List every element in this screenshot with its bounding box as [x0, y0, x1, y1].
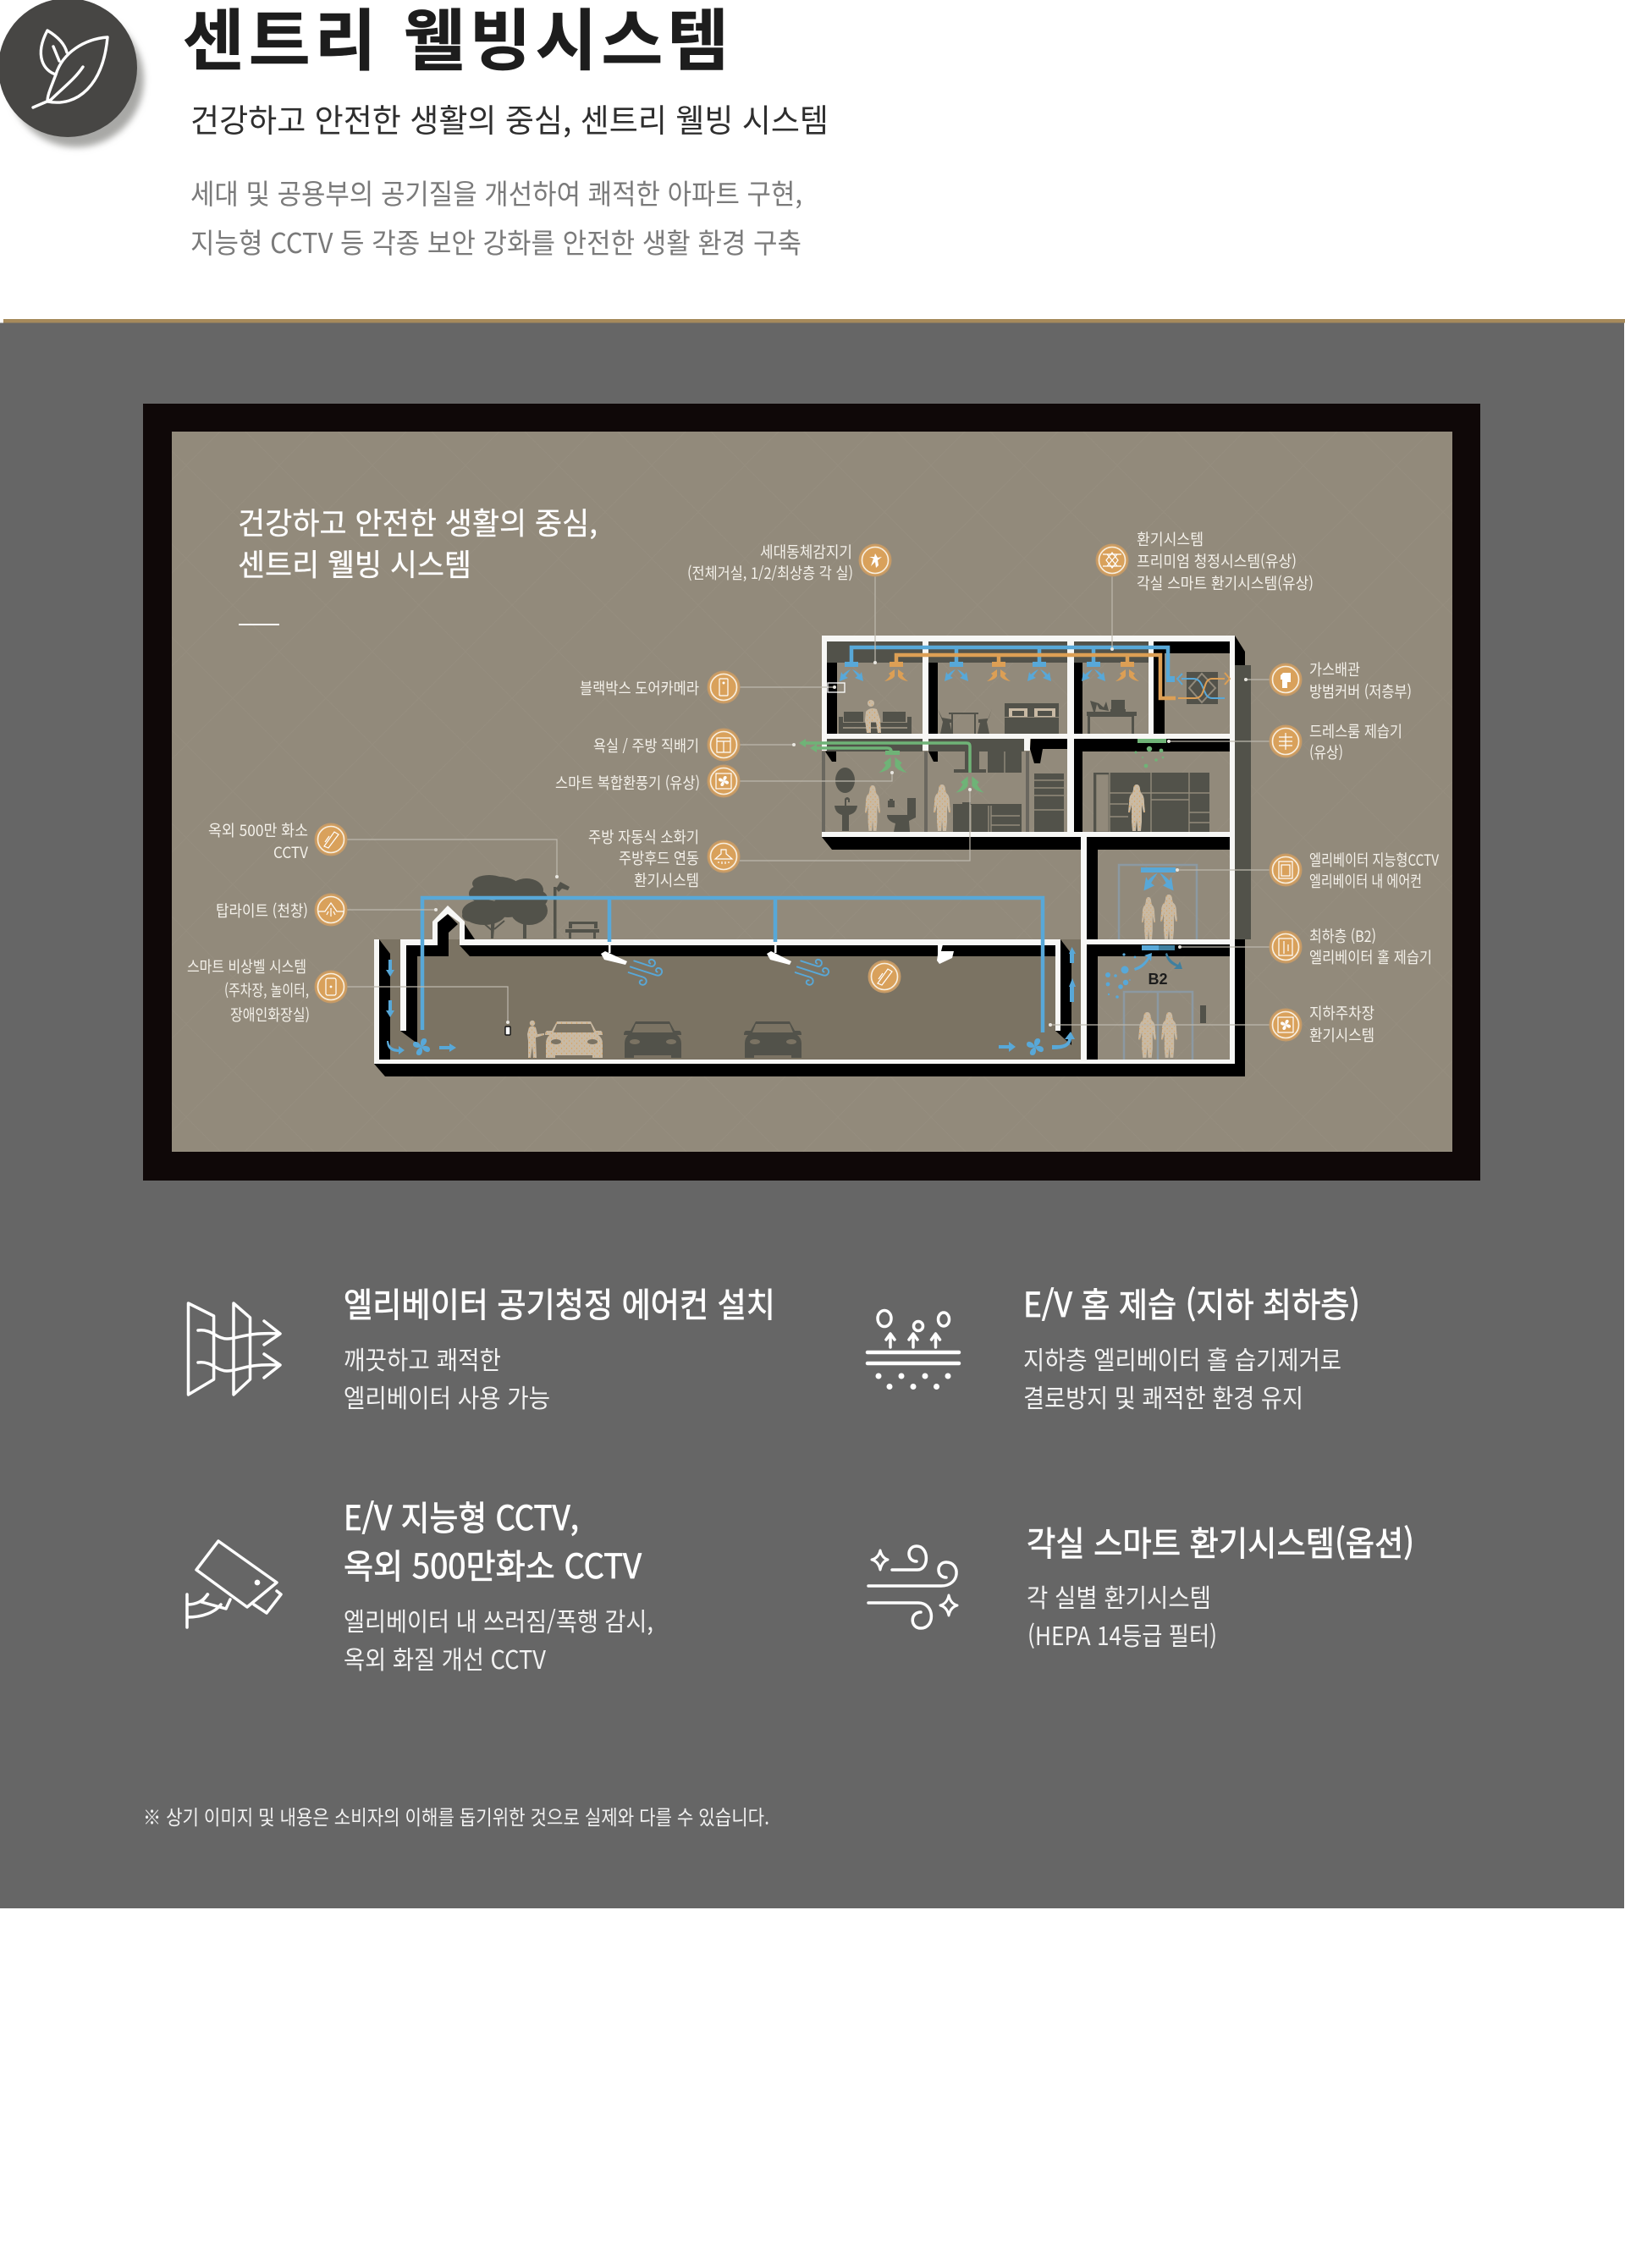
diagram labels: 세대동체감지기: [760, 541, 852, 563]
diagram labels: 블랙박스 도어카메라: [580, 677, 699, 699]
badge: ventilation filter: [1095, 543, 1129, 577]
diagram heading: 건강하고 안전한 생활의 중심,: [238, 499, 598, 543]
feature: E/V intelligent CCTV: 옥외 500만화소 CCTV: [344, 1539, 642, 1588]
diagram labels: 드레스룸 제습기: [1309, 720, 1402, 742]
feature: E/V intelligent CCTV: [344, 1491, 653, 1676]
badge: parking CCTV: [868, 960, 901, 994]
elevator shaft: [1081, 837, 1245, 1076]
badge: skylight: [315, 894, 347, 926]
person on sofa: [865, 700, 881, 733]
diagram labels: 엘리베이터 내 에어컨: [1309, 870, 1422, 892]
feature: elevator air purifying AC: 엘리베이터 공기청정 에어컨 설치: [344, 1278, 775, 1327]
subtitle: 건강하고 안전한 생활의 중심, 센트리 웰빙 시스템: [190, 95, 829, 141]
badge: kitchen hood: [708, 839, 740, 873]
furniture top floor: [839, 700, 1137, 734]
diagram labels: 환기시스템: [1309, 1024, 1374, 1046]
badge: dressing room dehumidifier: [1270, 724, 1302, 758]
diagram labels: 지하주차장: [1309, 1002, 1374, 1024]
diagram labels: 주방후드 연동: [619, 847, 699, 869]
feature: smart ventilation: (HEPA 14등급 필터): [1027, 1616, 1217, 1653]
parking walls: [374, 906, 1235, 1064]
badge: B2 elevator hall: [1270, 931, 1302, 963]
diagram labels: 각실 스마트 환기시스템(유상): [1137, 572, 1314, 594]
diagram labels: 가스배관: [1309, 658, 1360, 680]
feature: E/V hall dehumidifying: 지하층 엘리베이터 홀 습기제거로: [1023, 1340, 1341, 1377]
jet fans: [601, 944, 954, 965]
badge: parking ventilation: [1270, 1009, 1302, 1041]
top floor shadows: [827, 641, 1230, 735]
footnote: ※ 상기 이미지 및 내용은 소비자의 이해를 돕기위한 것으로 실제와 다를 수 있습니다.: [143, 1801, 769, 1830]
icon: dehumidify: [868, 1310, 959, 1390]
badge: elevator CCTV and AC: [1270, 853, 1302, 887]
diagram heading: [238, 499, 598, 625]
diagram labels: 탑라이트 (천창): [216, 900, 308, 922]
grey section background: [0, 319, 1625, 1908]
description: 지능형 CCTV 등 각종 보안 강화를 안전한 생활 환경 구축: [190, 221, 801, 261]
parking duct: [422, 898, 1043, 1032]
elevator cab: [1119, 865, 1197, 939]
building: upper floors: [822, 636, 1251, 1064]
badge: gas pipe cover: [1270, 663, 1302, 696]
badge: smart ventilator: [708, 765, 740, 797]
bench: [565, 922, 599, 939]
feature: E/V intelligent CCTV: 엘리베이터 내 쓰러짐/폭행 감시,: [344, 1601, 653, 1638]
exhaust ducts (green): [799, 739, 984, 793]
feature: E/V intelligent CCTV: E/V 지능형 CCTV,: [344, 1491, 579, 1540]
diagram labels: 엘리베이터 지능형CCTV: [1309, 849, 1439, 871]
icon: wind with sparkles: [868, 1546, 957, 1628]
diagram heading: 센트리 웰빙 시스템: [238, 541, 471, 585]
diagram labels: (유상): [1309, 741, 1343, 763]
badge: door camera: [708, 670, 740, 704]
outdoor pole and camera: [554, 882, 570, 939]
person at car: [527, 1021, 544, 1058]
description: 세대 및 공용부의 공기질을 개선하여 쾌적한 아파트 구현,: [190, 172, 802, 212]
diagram labels: 프리미엄 청정시스템(유상): [1137, 550, 1297, 572]
badge: bath kitchen exhaust: [708, 728, 740, 762]
feature: smart ventilation: 각 실별 환기시스템: [1027, 1577, 1211, 1615]
diagram labels: 엘리베이터 홀 제습기: [1309, 946, 1432, 968]
diagram labels: 옥외 500만 화소: [208, 819, 308, 841]
diagram labels: 최하층 (B2): [1309, 925, 1376, 947]
feature: E/V hall dehumidifying: 결로방지 및 쾌적한 환경 유지: [1023, 1378, 1303, 1415]
icon badges: [315, 543, 1302, 1041]
B2 dehumidifier: [1142, 945, 1159, 950]
underground parking: [374, 875, 1235, 1076]
icon: air filter: [188, 1303, 280, 1395]
diagram labels: [187, 528, 1439, 1046]
feature: elevator air purifying AC: 깨끗하고 쾌적한: [344, 1340, 501, 1377]
diagram labels: 스마트 비상벨 시스템: [187, 955, 306, 977]
dressing room dehumidifier: [1134, 739, 1166, 768]
badge: emergency bell: [315, 970, 347, 1004]
B2 label: B2: [1148, 971, 1168, 988]
second floor shadows: [826, 739, 1024, 751]
diagram labels: 장애인화장실): [230, 1004, 310, 1026]
diagram labels: (주차장, 놀이터,: [224, 979, 309, 1001]
ducts: supply and return air: [840, 647, 1176, 698]
feature: E/V hall dehumidifying: E/V 홈 제습 (지하 최하층): [1023, 1278, 1360, 1327]
diagram labels: 욕실 / 주방 직배기: [593, 735, 699, 757]
description: [190, 172, 802, 261]
icon: CCTV camera: [187, 1541, 281, 1627]
feature: E/V intelligent CCTV: 옥외 화질 개선 CCTV: [344, 1639, 547, 1676]
diagram labels: 스마트 복합환풍기 (유상): [555, 772, 700, 794]
elevator doors: [1124, 992, 1193, 1060]
feature: elevator air purifying AC: 엘리베이터 사용 가능: [344, 1378, 550, 1415]
airflow arrows and fans: [386, 947, 1076, 1055]
icon: leaf badge: [0, 0, 144, 147]
diagram labels: (전체거실, 1/2/최상층 각 실): [687, 562, 853, 584]
diagram labels: 방범커버 (저층부): [1309, 680, 1412, 702]
cars: [545, 1021, 603, 1058]
diagram labels: 환기시스템: [1137, 528, 1204, 550]
badge: outdoor CCTV: [315, 823, 347, 856]
diagram labels: CCTV: [273, 841, 308, 863]
feature: smart ventilation: [1027, 1517, 1414, 1653]
badge: motion sensor: [858, 543, 892, 577]
heat exchanger: [1177, 672, 1230, 704]
diagram labels: 환기시스템: [634, 869, 699, 891]
feature: E/V hall dehumidifying: [1023, 1278, 1360, 1415]
feature: smart ventilation: 각실 스마트 환기시스템(옵션): [1027, 1517, 1414, 1566]
panel: wellbeing diagram: [143, 404, 1480, 1181]
tree: [462, 875, 548, 939]
furniture second floor: [835, 751, 1209, 832]
feature: elevator air purifying AC: [344, 1278, 775, 1415]
diagram labels: 주방 자동식 소화기: [588, 826, 699, 848]
connector lines: [347, 576, 1270, 1035]
walls: [822, 636, 1235, 1064]
